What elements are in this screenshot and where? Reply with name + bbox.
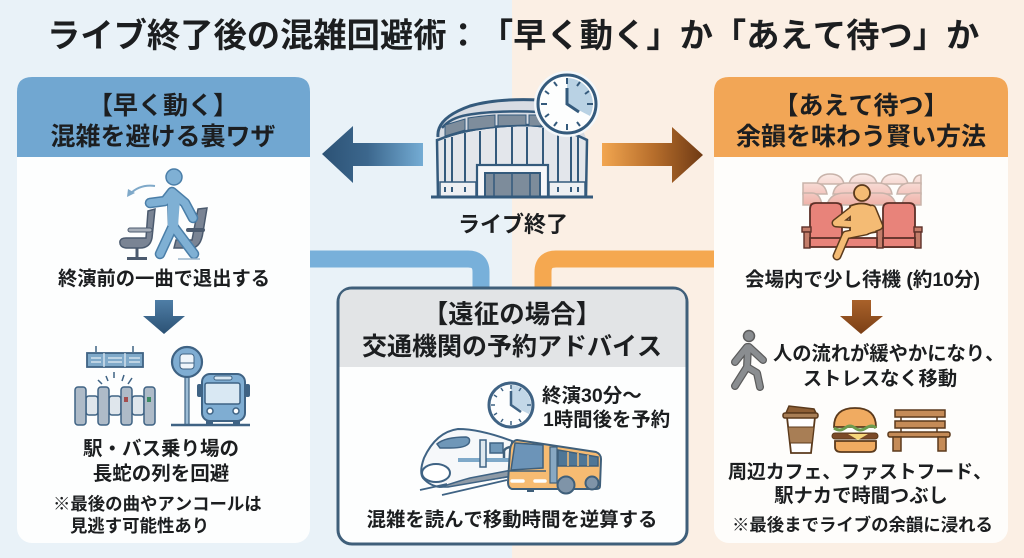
panel: move early [17, 77, 310, 543]
heading: 【早く動く】 [88, 92, 238, 120]
note [53, 494, 262, 536]
text: booking time [542, 385, 670, 431]
arrow: left [322, 126, 423, 183]
text: booking time: 終演30分〜 [542, 385, 642, 407]
note: 見逃す可能性あり [70, 516, 209, 536]
text: flow eases [773, 342, 1004, 390]
title: ライブ終了後の混雑回避術：「早く動く」か「あえて待つ」か [47, 17, 979, 55]
heading [50, 92, 276, 151]
icon: clock [489, 383, 533, 427]
text: work backwards: 混雑を読んで移動時間を逆算する [367, 508, 657, 531]
text: flow eases: ストレスなく移動 [803, 368, 957, 390]
text: avoid queues: 長蛇の列を回避 [93, 463, 230, 485]
icon: coach bus [504, 440, 601, 494]
arrow: down [840, 300, 883, 334]
text: booking time: 1時間後を予約 [543, 409, 670, 431]
heading [736, 92, 986, 151]
note: ※最後の曲やアンコールは [53, 494, 262, 514]
heading: 【遠征の場合】 [423, 301, 601, 329]
heading: 混雑を避ける裏ワザ [50, 123, 276, 151]
panel: expedition [338, 288, 687, 544]
text: wait in venue: 会場内で少し待機 (約10分) [745, 269, 980, 291]
heading [362, 301, 662, 361]
connector: blue line [310, 259, 481, 290]
icon: bench [888, 410, 950, 451]
text: avoid queues [83, 438, 239, 485]
panel: wait on purpose [714, 77, 1008, 543]
panel body [714, 77, 1008, 543]
panel frame [338, 288, 687, 544]
icon: walking person [735, 330, 763, 387]
panel header [714, 77, 1008, 157]
text: flow eases: 人の流れが緩やかになり、 [773, 342, 1004, 365]
connector: orange line [543, 259, 714, 290]
text: kill time [728, 461, 992, 507]
text: leave before the last song: 終演前の一曲で退出する [58, 268, 270, 290]
arrow: down [143, 300, 185, 334]
icon: bullet train [420, 429, 512, 495]
icon: coffee cup [783, 406, 818, 453]
icon: burger [832, 408, 878, 452]
heading: 余韻を味わう賢い方法 [736, 123, 986, 151]
icon: leaving seat [120, 169, 207, 259]
label: live ends: ライブ終了 [458, 212, 568, 237]
arrow: right [602, 127, 703, 183]
text: kill time: 周辺カフェ、ファストフード、 [728, 461, 992, 483]
background: left blue half [0, 0, 512, 558]
icon: ticket gates [75, 346, 155, 425]
background: right orange half [512, 0, 1024, 558]
icon: bus stop and bus [171, 347, 250, 425]
panel header [340, 290, 686, 367]
text: avoid queues: 駅・バス乗り場の [83, 438, 239, 460]
note: ※最後までライブの余韻に浸れる [732, 515, 993, 535]
icon: arena with clock [431, 71, 600, 197]
panel body [17, 77, 310, 543]
text: kill time: 駅ナカで時間つぶし [774, 485, 948, 507]
icon: seated person [802, 174, 922, 256]
icon: clock [534, 71, 600, 137]
panel header [17, 77, 310, 157]
heading: 交通機関の予約アドバイス [362, 333, 662, 361]
heading: 【あえて待つ】 [773, 92, 949, 120]
